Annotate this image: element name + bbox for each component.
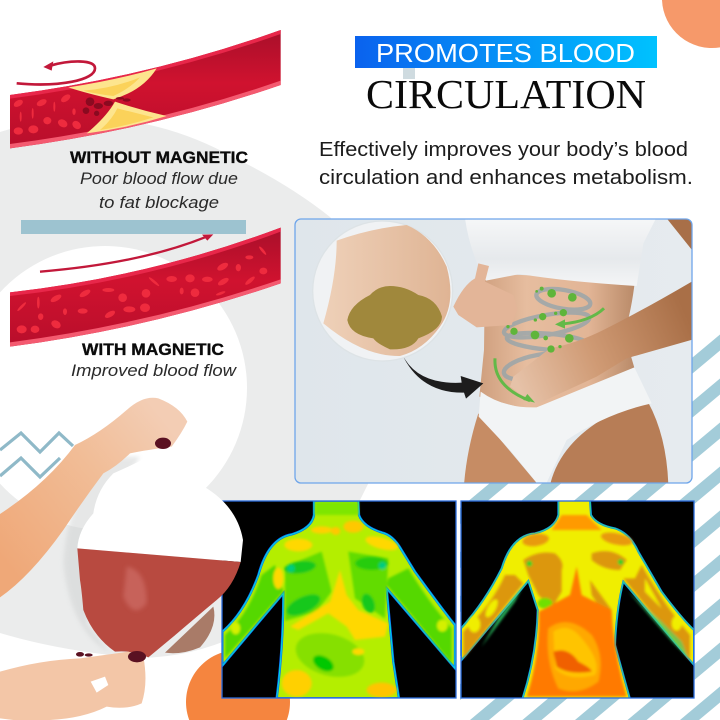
patch white liner	[77, 447, 243, 562]
nail upper	[155, 438, 171, 449]
title bar	[355, 36, 657, 79]
heading: with magnetic: WITH MAGNETIC	[82, 340, 224, 359]
patch red face	[77, 548, 241, 657]
plaque: fat blockage	[68, 68, 167, 133]
forearm and lower hand	[510, 281, 693, 405]
description line one: Effectively improves your body’s blood	[319, 138, 688, 161]
vessel: with magnetic	[10, 228, 281, 347]
blood cells blocked	[83, 97, 131, 116]
title: circulation: CIRCULATION	[366, 71, 646, 117]
zigzag decoration	[0, 433, 73, 477]
patch brown back	[165, 607, 214, 653]
lower hand	[0, 652, 145, 720]
arrow: reversed flow	[17, 61, 95, 84]
green bubbles	[506, 287, 577, 353]
heading: without magnetic: WITHOUT MAGNETIC	[70, 148, 248, 167]
torso	[479, 273, 635, 410]
nail lower	[128, 651, 146, 662]
body silhouette right	[461, 500, 694, 699]
flowing blood cells	[16, 246, 267, 333]
upper arm and hand	[0, 398, 187, 597]
background white circle	[0, 246, 247, 530]
soft shadow	[63, 457, 140, 653]
divider bar	[21, 220, 246, 234]
finger gaps	[91, 677, 108, 693]
green arrows	[495, 308, 604, 401]
diagonal blue stripes	[460, 334, 720, 720]
patch and hands photo	[0, 398, 243, 720]
thermal image: before	[222, 501, 456, 698]
thermal image: after	[461, 500, 694, 699]
text: poor blood flow: Poor blood flow due	[80, 169, 238, 188]
patch highlight	[123, 567, 147, 610]
patch	[347, 286, 442, 349]
panel: abdomen photo	[295, 218, 693, 485]
black arrow	[404, 358, 484, 398]
text: fat blockage: to fat blockage	[99, 193, 219, 212]
text: improved blood flow: Improved blood flow	[71, 361, 238, 380]
blood cells	[13, 93, 83, 135]
raised arm	[668, 220, 692, 250]
orange circle bottom	[186, 650, 290, 720]
zoom circle with patch	[312, 220, 453, 362]
legs	[464, 413, 538, 485]
description line two: circulation and enhances metabolism.	[319, 166, 693, 189]
vessel: without magnetic	[10, 30, 281, 148]
upper hand	[453, 263, 517, 327]
arrow: forward flow	[40, 234, 213, 272]
white briefs	[479, 367, 652, 483]
white top	[465, 218, 656, 286]
orange circle top right	[662, 0, 720, 48]
title bar: PROMOTES BLOOD	[376, 38, 635, 68]
thermal patches before	[225, 502, 452, 697]
spiral graphic	[502, 285, 592, 385]
thermal patches after	[463, 515, 690, 697]
background gray blob	[0, 118, 400, 658]
body silhouette left	[222, 501, 455, 698]
